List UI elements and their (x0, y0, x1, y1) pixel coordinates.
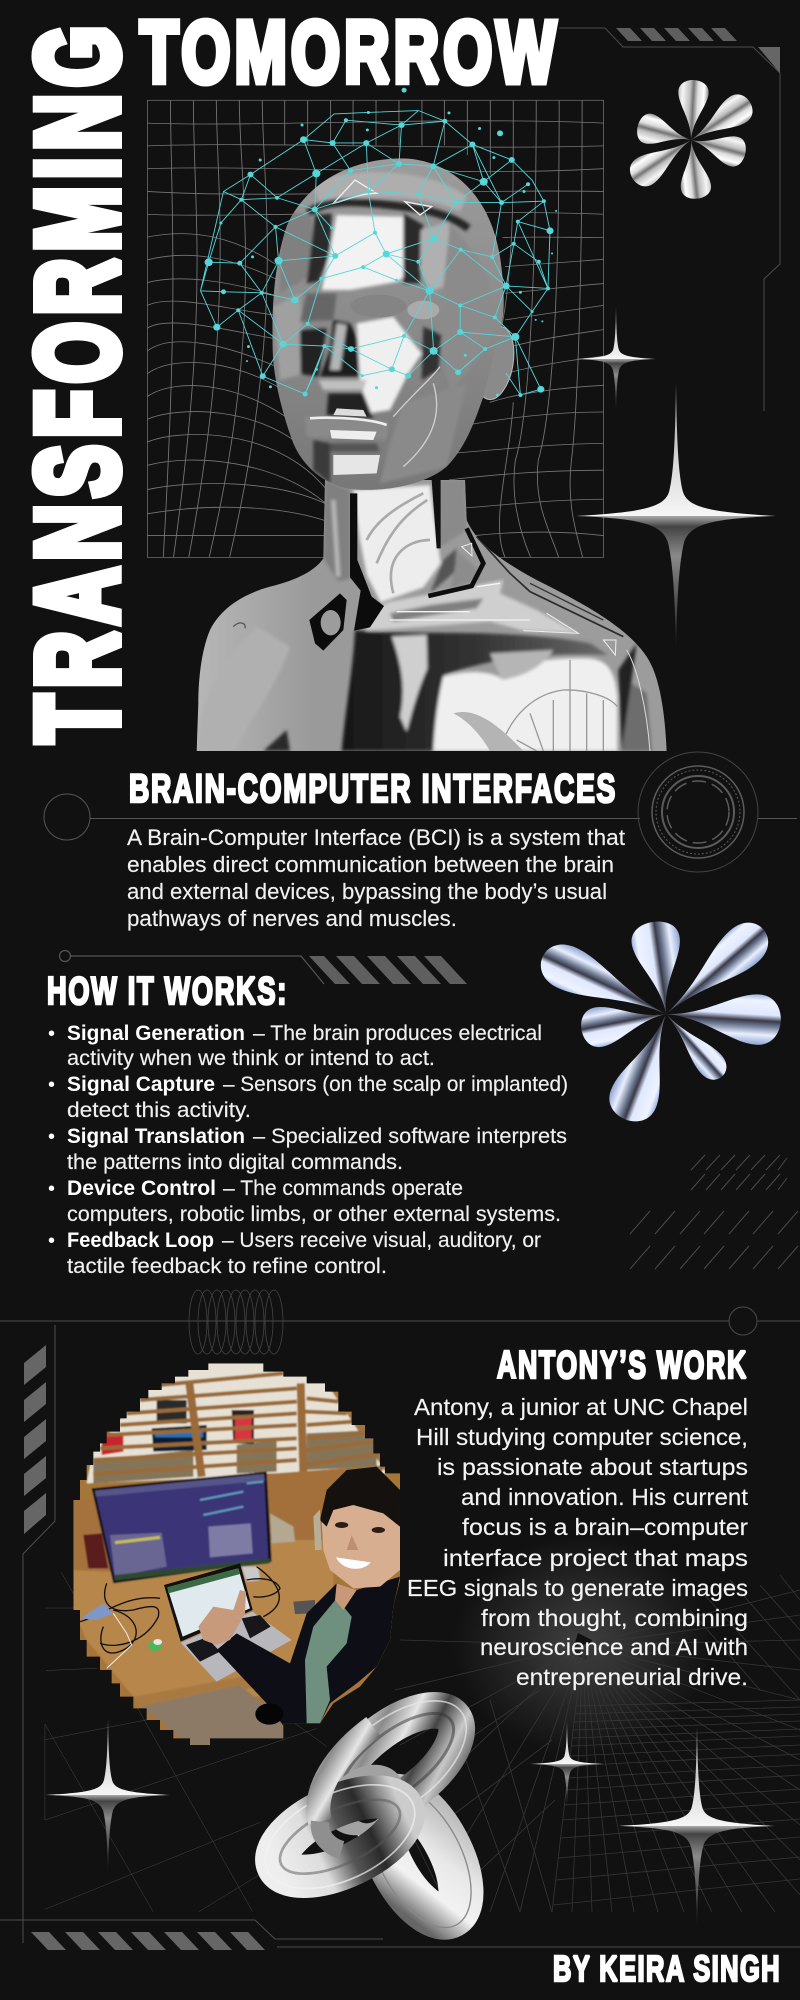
list: how it works steps: – Specialized software interprets (253, 1125, 567, 1148)
decoration: spring coil (189, 1290, 283, 1354)
text block: Antony bio: interface project that maps (443, 1545, 748, 1571)
list: how it works steps: Device Control (67, 1177, 216, 1200)
bottom stripes (31, 1932, 265, 1950)
sparse perspective lines left (45, 1572, 327, 1912)
frame corner triangle (758, 47, 780, 73)
neural network mesh (201, 88, 557, 397)
decoration: left tech frame (0, 1325, 800, 1947)
chrome head (270, 157, 510, 497)
text block: BCI definition (127, 825, 625, 931)
icon: chrome flower small (625, 79, 758, 200)
text block: Antony bio: focus is a brain–computer (462, 1514, 748, 1540)
list: how it works steps: Signal Translation (67, 1125, 245, 1148)
decoration: connector line (60, 950, 324, 984)
icon: small sparkle top (576, 306, 656, 412)
list: how it works steps: – The brain produces electrical (253, 1022, 542, 1045)
decoration: concentric tech circles (638, 752, 758, 872)
icon: right sparkle bottom (619, 1726, 775, 1926)
decoration: section rule with circle (0, 1307, 800, 1335)
icon: chrome flower large (533, 914, 782, 1128)
list: how it works steps: • (48, 1023, 55, 1045)
text block: Antony bio: neuroscience and AI with (480, 1634, 748, 1660)
text block: BCI definition: and external devices, bypassing the body’s usual (127, 879, 607, 904)
text block: Antony bio: EEG signals to generate images (407, 1575, 748, 1601)
icon: left sparkle bottom (46, 1718, 170, 1872)
list: how it works steps: Signal Generation (67, 1022, 245, 1045)
list: how it works steps: • (48, 1126, 55, 1148)
photo: Antony at his desk (73, 1363, 400, 1745)
top-right stripes (616, 28, 737, 41)
text block: Antony bio: from thought, combining (481, 1605, 748, 1631)
text block: Antony bio: Antony, a junior at UNC Chapel (414, 1394, 748, 1420)
title: TOMORROW: TOMORROW (140, 4, 560, 101)
decoration: hatch marks (630, 1155, 798, 1269)
list: how it works steps: Signal Capture (67, 1073, 215, 1096)
heading: how it works: HOW IT WORKS: (47, 970, 288, 1013)
text block: BCI definition: A Brain-Computer Interface (BCI) is a system that (127, 825, 625, 850)
text block: Antony bio: entrepreneurial drive. (516, 1664, 748, 1690)
perspective grid floor (395, 1535, 800, 1912)
list: how it works steps: the patterns into digital commands. (67, 1151, 403, 1174)
list: how it works steps: tactile feedback to refine control. (67, 1255, 387, 1278)
text block: Antony bio: is passionate about startups (437, 1454, 748, 1480)
list: how it works steps: • (48, 1074, 55, 1096)
icon: large sparkle top (576, 383, 776, 649)
list: how it works steps: Feedback Loop (67, 1229, 214, 1252)
text block: Antony bio (407, 1394, 749, 1690)
list: how it works steps: activity when we think or intend to act. (67, 1047, 435, 1070)
list: how it works steps: – Users receive visual, auditory, or (222, 1229, 541, 1252)
list: how it works steps: • (48, 1230, 55, 1252)
decoration: left circle and rule (44, 794, 797, 840)
top-right tech frame (559, 28, 780, 411)
list: how it works steps: computers, robotic limbs, or other external systems. (67, 1203, 561, 1226)
figure: chrome head and shoulders (190, 157, 680, 751)
icon: chrome trefoil knot (249, 1677, 492, 1944)
text block: BCI definition: pathways of nerves and muscles. (127, 906, 457, 931)
chrome body (190, 480, 680, 751)
text block: Antony bio: Hill studying computer science, (416, 1424, 748, 1450)
list: how it works steps (48, 1022, 568, 1278)
icon: middle sparkle bottom (530, 1720, 604, 1808)
list: how it works steps: – Sensors (on the scalp or implanted) (223, 1073, 568, 1096)
warped wireframe grid (147, 100, 604, 557)
middle stripes (309, 956, 467, 984)
list: how it works steps: detect this activity. (67, 1099, 251, 1122)
text block: BCI definition: enables direct communication between the brain (127, 852, 614, 877)
list: how it works steps: – The commands operate (223, 1177, 463, 1200)
ear (471, 323, 519, 403)
text block: Antony bio: and innovation. His current (461, 1484, 749, 1510)
left vertical stripes (24, 1345, 46, 1534)
list: how it works steps: • (48, 1178, 55, 1200)
